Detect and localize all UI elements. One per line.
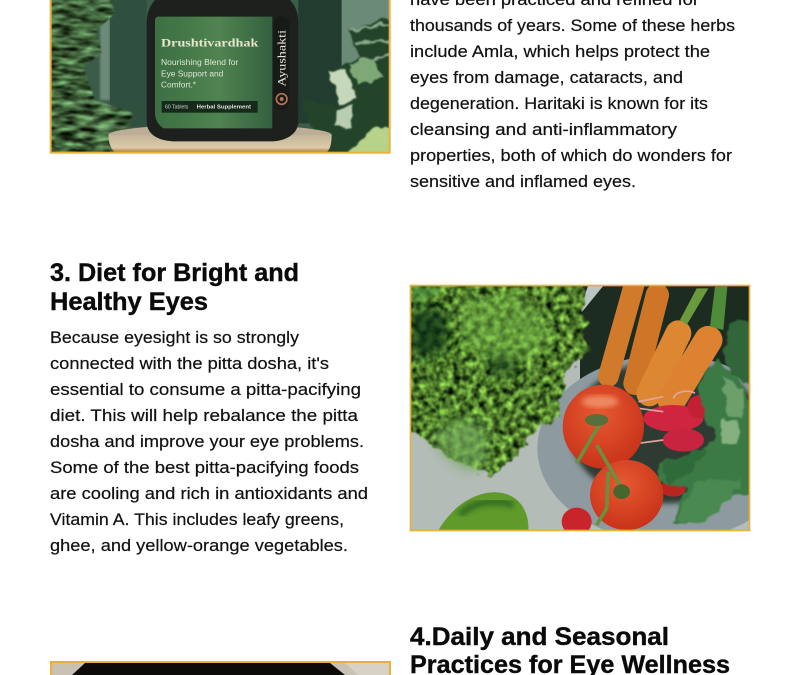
image: Drushtivardhak supplement jar [50, 0, 397, 157]
jar label text: Ayushakti [274, 29, 288, 87]
jar label text: Drushtivardhak [161, 38, 259, 50]
image: vegetables in a bowl [410, 284, 750, 532]
text block: herbs paragraph: properties, both of which do wonders for [410, 147, 733, 165]
jar label text [161, 29, 288, 113]
carrots [608, 282, 708, 400]
heading: 4. Daily and Seasonal Practices for Eye Wellness [410, 623, 730, 675]
text block: diet paragraph: connected with the pitta dosha, it's [50, 355, 329, 373]
radishes [643, 405, 703, 432]
pedestal [108, 126, 332, 136]
text block: diet paragraph: dosha and improve your eye problems. [50, 433, 364, 451]
tomatoes [563, 385, 644, 469]
jar label text: 60 Tablets [165, 105, 188, 111]
text block: diet paragraph: ghee, and yellow-orange vegetables. [50, 537, 348, 555]
text block: diet paragraph: Vitamin A. This includes leafy greens, [50, 511, 344, 529]
text block: herbs paragraph [410, 0, 735, 191]
heading: 3. Diet for Bright and Healthy Eyes [50, 259, 299, 316]
text block: herbs paragraph: thousands of years. Some of these herbs [410, 17, 735, 35]
text block: diet paragraph: Some of the best pitta-pacifying foods [50, 459, 359, 477]
jar label text: Herbal Supplement [197, 105, 251, 111]
lettuce light and shadow patches [410, 285, 557, 472]
text block: diet paragraph: are cooling and rich in antioxidants and [50, 485, 368, 503]
text block: diet paragraph: Because eyesight is so strongly [50, 329, 300, 347]
text block: herbs paragraph: cleansing and anti-inflammatory [410, 121, 678, 139]
lettuce [407, 282, 585, 478]
bowl [537, 356, 749, 530]
greens [657, 360, 757, 523]
green mango [437, 492, 528, 533]
text block: diet paragraph: essential to consume a pitta-pacifying [50, 381, 361, 399]
jar body [147, 0, 298, 141]
heading: 3. Diet for Bright and Healthy Eyes: 3. Diet for Bright and [50, 259, 299, 287]
text block: herbs paragraph: include Amla, which helps protect the [410, 43, 710, 61]
heading: 4. Daily and Seasonal Practices for Eye Wellness: 4.Daily and Seasonal [410, 623, 669, 651]
heading: 3. Diet for Bright and Healthy Eyes: Healthy Eyes [50, 288, 208, 316]
jar label text: Comfort.* [161, 81, 196, 90]
text block: herbs paragraph: eyes from damage, cataracts, and [410, 69, 683, 87]
text block: diet paragraph [50, 329, 368, 555]
right foliage [309, 17, 389, 152]
text block: herbs paragraph: degeneration. Haritaki is known for its [410, 95, 708, 113]
text block: diet paragraph: diet. This will help rebalance the pitta [50, 407, 359, 425]
jar label text: Nourishing Blend for [161, 58, 239, 67]
jar label text: Eye Support and [161, 69, 223, 78]
left foliage [50, 0, 133, 153]
text block: herbs paragraph: sensitive and inflamed eyes. [410, 173, 636, 191]
image: eye wellness photo, top edge [50, 661, 391, 675]
